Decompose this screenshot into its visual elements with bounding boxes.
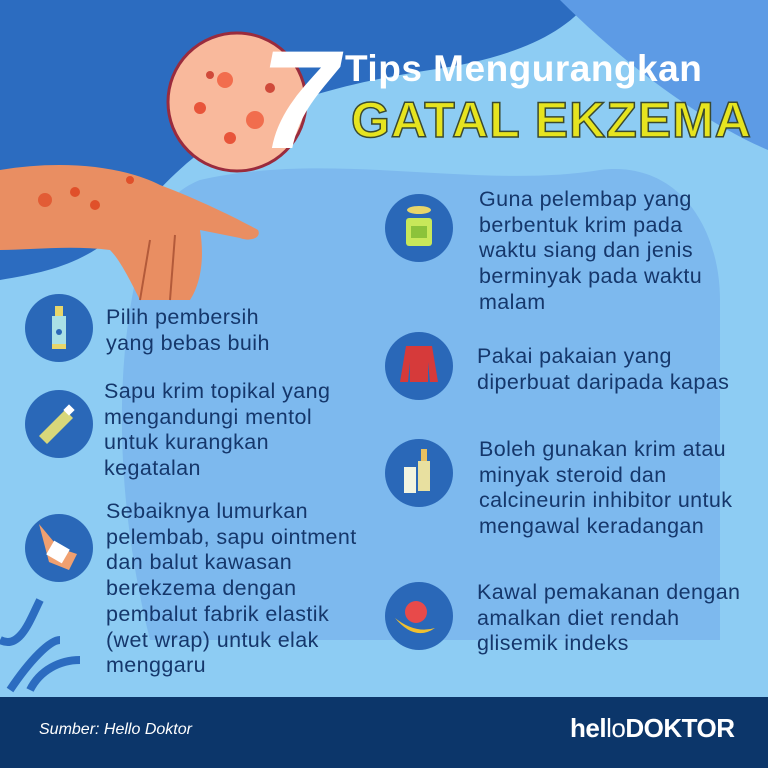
tip 4 text: berminyak pada waktu (479, 264, 702, 288)
tip 3 text: pelembab, sapu ointment (106, 525, 357, 549)
title: GATAL EKZEMA (351, 92, 752, 148)
title (260, 21, 752, 178)
logo: helloDOKTOR (570, 713, 735, 743)
tip 3 icon (25, 514, 93, 582)
tip 2 text (104, 379, 330, 480)
source: Sumber: Hello Doktor (39, 721, 192, 738)
tip 3 text: berekzema dengan (106, 576, 296, 600)
tip 3 text: pembalut fabrik elastik (106, 602, 329, 626)
tip 1 icon (25, 294, 93, 362)
tip 1 text: yang bebas buih (106, 331, 270, 355)
tip 2 text: Sapu krim topikal yang (104, 379, 330, 403)
tip 7 text: amalkan diet rendah (477, 606, 679, 630)
tip 2 text: untuk kurangkan (104, 430, 269, 454)
tip 2 text: mengandungi mentol (104, 405, 312, 429)
tip 6 text: Boleh gunakan krim atau (479, 437, 726, 461)
tip 2 icon (25, 390, 93, 458)
tip 4 text: malam (479, 290, 546, 314)
tip 6 text (479, 437, 732, 538)
tip 3 text: (wet wrap) untuk elak (106, 628, 319, 652)
tip 5 icon (385, 332, 453, 400)
tip 4 icon (385, 194, 453, 262)
tip 4 text: Guna pelembap yang (479, 187, 692, 211)
tip 3 text: menggaru (106, 653, 206, 677)
tip 5 text: Pakai pakaian yang (477, 344, 672, 368)
tip 1 text (106, 305, 270, 355)
illustration: hand with eczema (0, 32, 307, 300)
footer (0, 697, 768, 768)
tip 7 icon (385, 582, 453, 650)
title: 7 (260, 21, 338, 178)
tip 4 text (479, 187, 702, 314)
tip 4 text: waktu siang dan jenis (479, 238, 693, 262)
tip 1 text: Pilih pembersih (106, 305, 259, 329)
tip 3 text (106, 499, 357, 677)
tip 6 text: mengawal keradangan (479, 514, 704, 538)
tip 6 text: minyak steroid dan (479, 463, 667, 487)
tip 5 text (477, 344, 729, 394)
tip 6 icon (385, 439, 453, 507)
tip 4 text: berbentuk krim pada (479, 213, 683, 237)
tip 3 text: dan balut kawasan (106, 550, 292, 574)
tip 7 text: Kawal pemakanan dengan (477, 580, 740, 604)
title: Tips Mengurangkan (345, 48, 702, 89)
tip 7 text: glisemik indeks (477, 631, 629, 655)
tip 6 text: calcineurin inhibitor untuk (479, 488, 732, 512)
tip 7 text (477, 580, 740, 655)
tip 5 text: diperbuat daripada kapas (477, 370, 729, 394)
tip 3 text: Sebaiknya lumurkan (106, 499, 308, 523)
zoom lens (168, 33, 306, 171)
tip 2 text: kegatalan (104, 456, 201, 480)
